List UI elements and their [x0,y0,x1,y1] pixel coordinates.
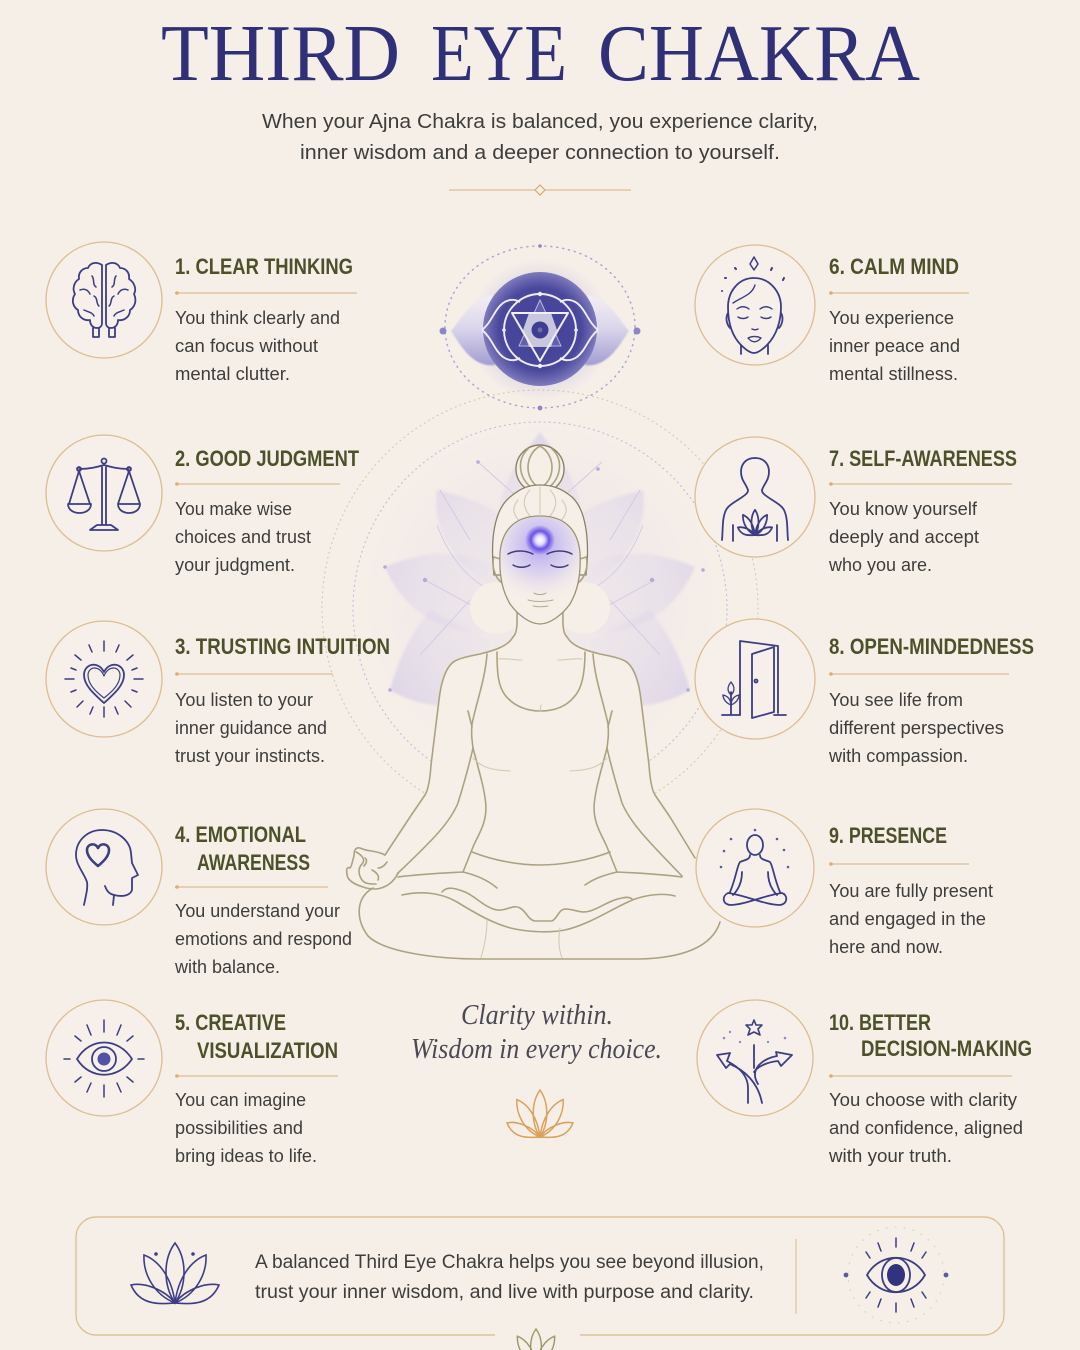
body fill [358,608,720,959]
banner text: trust your inner wisdom, and live with purpose and clarity. [255,1282,754,1303]
description [828,690,1004,766]
description [828,499,979,575]
legs [398,872,497,888]
heading: DECISION-MAKING [861,1036,1032,1061]
description [174,901,352,977]
rule [175,1074,338,1078]
title: EYE [431,10,567,98]
divider ornament [449,185,631,195]
icon: lotus [131,1243,219,1304]
mandala disc [483,272,597,386]
icon: forked path with star [697,1000,813,1116]
heading: 1. CLEAR THINKING [175,254,353,279]
heading: AWARENESS [197,850,310,875]
description: your judgment. [175,555,295,575]
description [175,308,340,384]
heading [175,1010,338,1063]
description [175,690,327,766]
heading: 2. GOOD JUDGMENT [175,446,359,471]
cream shoulder glow [470,582,522,634]
item 5: creative visualization [46,1000,338,1166]
description: You listen to your [175,690,313,710]
banner border [76,1217,1004,1335]
rule [829,291,969,295]
lotus hair bun [516,445,564,493]
mandala lines [482,294,598,366]
quote [411,1000,662,1065]
title [161,10,920,98]
description: here and now. [829,937,943,957]
description: bring ideas to life. [175,1146,317,1166]
rule [829,482,1012,486]
icon: meditating person [696,809,814,927]
arms and torso [385,608,517,855]
rule [175,885,328,889]
description [175,499,311,575]
hair [493,485,587,575]
closing banner [76,1217,1004,1335]
icon: head with heart [46,809,162,925]
heading: 4. EMOTIONAL [175,822,306,847]
banner text: A balanced Third Eye Chakra helps you see beyond illusion, [255,1252,764,1273]
description [829,308,960,384]
item 10: better decision-making [697,1000,1032,1166]
rule [829,1074,1012,1078]
ears [493,557,587,583]
rule [829,862,969,866]
description: inner peace and [829,336,960,356]
icon: brain [46,242,162,358]
description: You choose with clarity [829,1090,1017,1110]
rule [829,672,1009,676]
description [175,1090,317,1166]
description: with balance. [174,957,280,977]
description: trust your instincts. [175,746,325,766]
heading [829,1010,1032,1061]
heading [175,822,310,875]
heading: 8. OPEN-MINDEDNESS [829,634,1034,659]
description: You are fully present [829,881,993,901]
description: You can imagine [175,1090,306,1110]
icon: person with lotus [695,437,815,557]
description: You make wise [175,499,292,519]
seated woman figure [347,445,720,959]
heading: 3. TRUSTING INTUITION [175,634,390,659]
heading: 10. BETTER [829,1010,931,1035]
description: You understand your [175,901,340,921]
description: with your truth. [828,1146,952,1166]
description: mental stillness. [829,364,958,384]
facial features [508,551,572,607]
heading: 5. CREATIVE [175,1010,286,1035]
item 8: open-mindedness [695,619,1034,766]
description: You think clearly and [175,308,340,328]
icon: gold lotus [507,1090,573,1137]
quote: Clarity within. [461,1000,613,1031]
description [829,881,993,957]
banner text [255,1252,764,1303]
heading: 7. SELF-AWARENESS [829,446,1017,471]
description: You see life from [829,690,963,710]
rule [175,291,357,295]
hand [347,848,398,889]
title: THIRD [161,10,400,98]
subtitle: inner wisdom and a deeper connection to yourself. [300,142,780,164]
quote: Wisdom in every choice. [411,1034,662,1065]
icon: radiant eye [46,1000,162,1116]
icon: open door and plant [695,619,815,739]
description: with compassion. [828,746,968,766]
subtitle [262,111,818,164]
icon: serene face [695,245,815,365]
item 7: self-awareness [695,437,1017,575]
item 6: calm mind [695,245,969,384]
icon: eye [844,1227,948,1323]
rule [175,672,333,676]
icon: radiant heart [46,621,162,737]
item 2: good judgment [46,435,359,575]
description: and confidence, aligned [829,1118,1023,1138]
description: inner guidance and [175,718,327,738]
description: possibilities and [175,1118,303,1138]
chakra symbol [440,244,640,410]
icon: scales [46,435,162,551]
description [828,1090,1023,1166]
title: CHAKRA [598,10,920,98]
waist [472,852,610,865]
tank top neckline [497,652,585,711]
background lotus aura [322,390,758,826]
description: emotions and respond [175,929,352,949]
third eye glow [525,525,555,555]
item 4: emotional awareness [46,809,352,977]
rule [175,482,340,486]
item 3: trusting intuition [46,621,390,766]
item 9: presence [696,809,993,957]
description: You know yourself [829,499,978,519]
heading: VISUALIZATION [197,1038,338,1063]
face [500,516,580,624]
description: different perspectives [829,718,1004,738]
heading: 9. PRESENCE [829,823,947,848]
side petals [451,295,495,365]
item 1: clear thinking [46,242,357,384]
description: deeply and accept [829,527,979,547]
icon: olive lotus [510,1329,562,1350]
description: can focus without [175,336,318,356]
heading: 6. CALM MIND [829,254,959,279]
description: and engaged in the [829,909,986,929]
subtitle: When your Ajna Chakra is balanced, you experience clarity, [262,111,818,133]
description: You experience [829,308,954,328]
description: who you are. [828,555,932,575]
description: mental clutter. [175,364,290,384]
description: choices and trust [175,527,311,547]
